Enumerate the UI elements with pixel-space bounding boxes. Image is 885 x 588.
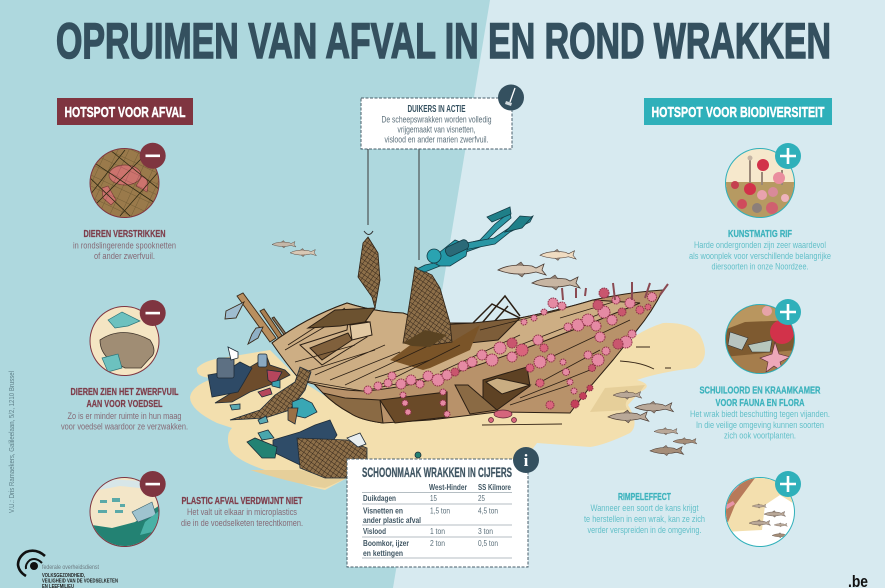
- panel: schoonmaak wrakken in cijfers: SS Kilmore: [478, 482, 511, 492]
- illustration: broken masts with rags: [225, 293, 287, 344]
- text: rimpeleffect: Wanneer een soort de kans krijgt: [590, 503, 699, 513]
- icon: info badge: [513, 447, 539, 473]
- logo: federal public service: VOLKSGEZONDHEID,: [42, 573, 85, 579]
- illustration: fish school above the wreck: [272, 240, 580, 290]
- heading: hotspot voor biodiversiteit: [644, 98, 832, 125]
- text: dieren verstrikken: DIEREN VERSTRIKKEN: [84, 229, 166, 240]
- text: kunstmatig rif: KUNSTMATIG RIF: [728, 229, 792, 240]
- panel: schoonmaak wrakken in cijfers: Visnetten en: [363, 506, 403, 516]
- text: dieren verstrikken: in rondslingerende spooknetten: [73, 240, 176, 250]
- illustration: crab on the sand: [488, 410, 516, 422]
- text: plastic afval verdwijnt niet: Het valt uit elkaar in microplastics: [187, 507, 297, 517]
- panel: schoonmaak wrakken in cijfers: ander plastic afval: [363, 515, 421, 525]
- icon: minus badge 1: [140, 143, 166, 169]
- text: kunstmatig rif: als woonplek voor verschillende belangrijke: [689, 251, 831, 261]
- icon: plus badge 1: [775, 143, 801, 169]
- text: plastic afval verdwijnt niet: die in de voedselketen terechtkomen.: [181, 518, 303, 528]
- callout: duikers in actie: De scheepswrakken worden volledig: [382, 114, 492, 124]
- illustration: fish school near the bow: [608, 390, 697, 456]
- panel: schoonmaak wrakken in cijfers: 1 ton: [430, 526, 445, 536]
- icon: minus badge 3: [140, 471, 166, 497]
- text: dieren zien het zwerfvuil: AAN VOOR VOEDSEL: [86, 399, 162, 410]
- heading: hotspot voor afval: [57, 98, 193, 125]
- logo: federal public service: VEILIGHEID VAN DE VOEDSELKETEN: [42, 578, 118, 584]
- icon: plus badge 2: [775, 299, 801, 325]
- text: dieren zien het zwerfvuil: Zo is er minder ruimte in hun maag: [68, 411, 182, 421]
- icon: ripple effect: [724, 476, 796, 548]
- callout: duikers in actie: DUIKERS IN ACTIE: [408, 104, 466, 115]
- callout: duikers in actie: vrijgemaakt van visnetten,: [398, 124, 476, 134]
- text: rimpeleffect: [584, 492, 705, 535]
- illustration: waste on the sand: [208, 347, 421, 478]
- text: rimpeleffect: te herstellen in een wrak, kan ze zich: [584, 514, 705, 524]
- icon: info badge: i: [524, 451, 529, 470]
- text: dieren verstrikken: [73, 229, 176, 261]
- panel: schoonmaak wrakken in cijfers: Vislood: [363, 526, 386, 536]
- panel: schoonmaak wrakken in cijfers: 1,5 ton: [430, 506, 450, 516]
- callout: duikers in actie: [361, 98, 512, 149]
- text: schuiloord en kraamkamer: In die veilige omgeving kunnen soorten: [696, 420, 824, 430]
- illustration: hanging net on cable: [358, 149, 380, 308]
- text: plastic afval verdwijnt niet: PLASTIC AFVAL VERDWIJNT NIET: [182, 496, 302, 507]
- text: responsible publisher: V.U.: Dris Ramaekers, Galileelaan, 5/2, 1210 Brussel: [9, 371, 16, 513]
- icon: plus badge 3: [775, 471, 801, 497]
- icon: microplastics on sand: [90, 477, 160, 547]
- panel: schoonmaak wrakken in cijfers: Boomkor, ijzer: [363, 538, 410, 548]
- text: schuiloord en kraamkamer: zich ook voortplanten.: [724, 430, 796, 440]
- text: schuiloord en kraamkamer: [690, 386, 830, 440]
- text: schuiloord en kraamkamer: VOOR FAUNA EN FLORA: [716, 398, 804, 409]
- icon: seal with plastic: [90, 306, 160, 376]
- illustration: shipwreck hull: [272, 290, 663, 423]
- text: schuiloord en kraamkamer: SCHUILOORD EN KRAAMKAMER: [700, 386, 821, 396]
- text: dieren zien het zwerfvuil: [61, 387, 188, 432]
- text: rimpeleffect: RIMPELEFFECT: [618, 492, 671, 503]
- illustration: coral stalks on the bow: [562, 282, 668, 300]
- illustration: marine growth on the wreck: [364, 288, 656, 417]
- panel: schoonmaak wrakken in cijfers: 3 ton: [478, 526, 493, 536]
- panel: schoonmaak wrakken in cijfers: West-Hinder: [429, 482, 468, 492]
- text: kunstmatig rif: [689, 229, 831, 272]
- illustration: sand bed: [190, 323, 705, 490]
- panel: schoonmaak wrakken in cijfers: 15: [430, 493, 437, 503]
- logo: federal public service: [18, 551, 118, 588]
- text: dieren zien het zwerfvuil: voor voedsel waardoor ze verzwakken.: [61, 422, 188, 432]
- icon: artificial reef: [724, 147, 796, 222]
- icon: crab in net: [90, 148, 160, 218]
- panel: schoonmaak wrakken in cijfers: SCHOONMAAK WRAKKEN IN CIJFERS: [362, 465, 512, 480]
- text: schuiloord en kraamkamer: Het wrak biedt beschutting tegen vijanden.: [690, 409, 830, 419]
- text: dieren verstrikken: of ander zwerfvuil.: [94, 251, 155, 261]
- panel: schoonmaak wrakken in cijfers: 25: [478, 493, 485, 503]
- panel: schoonmaak wrakken in cijfers: 4,5 ton: [478, 506, 498, 516]
- heading: hotspot voor afval: HOTSPOT VOOR AFVAL: [64, 105, 186, 121]
- text: plastic afval verdwijnt niet: [181, 496, 303, 528]
- panel: schoonmaak wrakken in cijfers: Duikdagen: [363, 493, 396, 503]
- icon: brush badge: [498, 84, 524, 110]
- icon: minus badge 2: [140, 300, 166, 326]
- icon: shelter in the wreck: [724, 303, 796, 375]
- illustration: diver: [417, 207, 533, 272]
- panel: schoonmaak wrakken in cijfers: 0,5 ton: [478, 538, 498, 548]
- panel: schoonmaak wrakken in cijfers: en kettingen: [363, 548, 403, 558]
- text: dieren zien het zwerfvuil: DIEREN ZIEN HET ZWERFVUIL: [70, 387, 178, 398]
- text: kunstmatig rif: Harde ondergronden zijn zeer waardevol: [694, 240, 826, 250]
- panel: schoonmaak wrakken in cijfers: [347, 459, 528, 567]
- illustration: net lifted from the wreck: [403, 149, 452, 347]
- text: rimpeleffect: verder verspreiden in de omgeving.: [588, 525, 702, 535]
- heading: hotspot voor biodiversiteit: HOTSPOT VOOR BIODIVERSITEIT: [652, 105, 825, 121]
- logo: federal public service: federale overheidsdienst: [42, 565, 99, 571]
- panel: schoonmaak wrakken in cijfers: 2 ton: [430, 538, 445, 548]
- text: kunstmatig rif: diersoorten in onze Noordzee.: [712, 262, 808, 272]
- callout: duikers in actie: vislood en ander marien zwerfvuil.: [384, 134, 488, 144]
